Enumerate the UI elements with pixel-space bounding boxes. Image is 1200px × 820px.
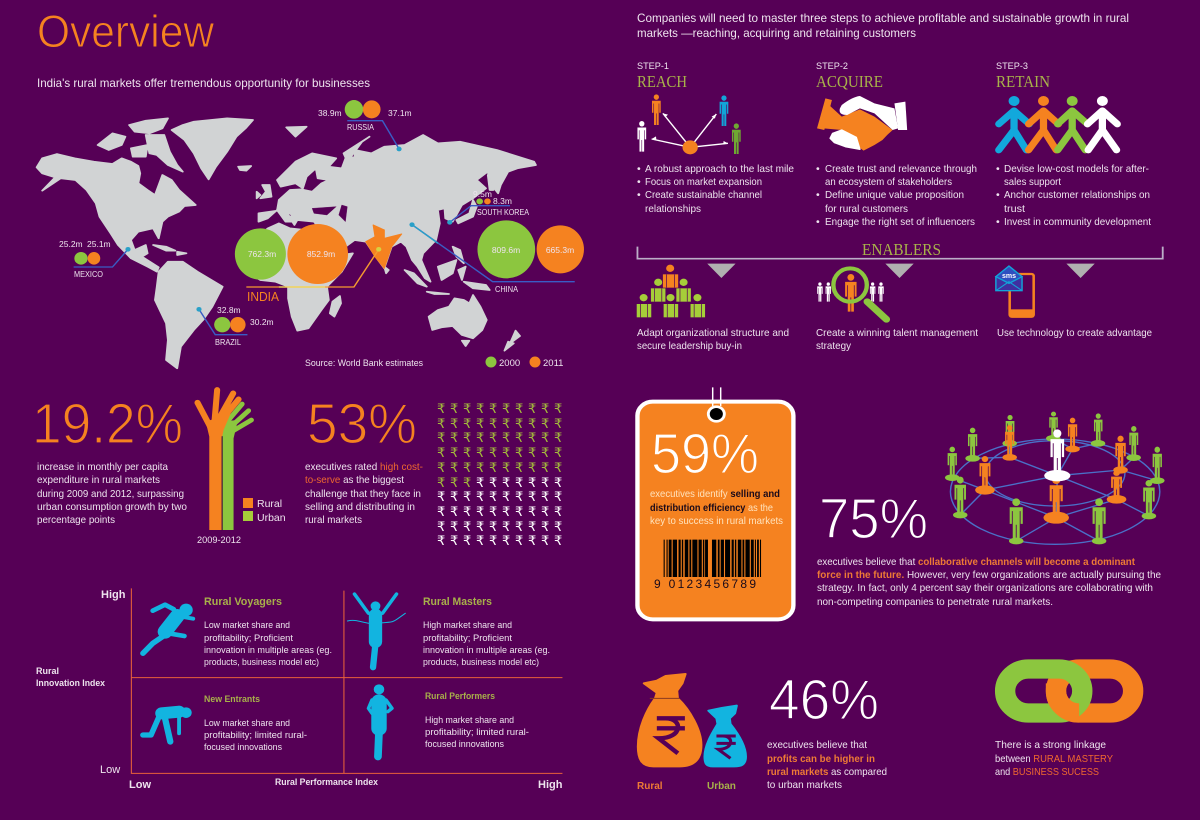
map legend: 2011 <box>543 358 563 369</box>
text: Rural Voyagers: profitability; Proficient <box>204 633 293 644</box>
network of people <box>945 412 1165 544</box>
text: 59% description: executives identify selling and <box>650 488 780 500</box>
text: enabler 2: Create a winning talent management <box>816 327 978 339</box>
text: 59% description: key to success in rural markets <box>650 515 783 527</box>
India highlight <box>366 225 402 268</box>
text: enabler 1: secure leadership buy-in <box>637 340 742 352</box>
country labels: 38.9m <box>318 108 342 118</box>
text: linkage: and BUSINESS SUCESS <box>995 766 1099 778</box>
rupee grid: 53 of 100 green <box>437 402 562 549</box>
rupee grid: 53 of 100 green: ₹₹₹₹₹₹₹₹₹₹ <box>437 461 562 476</box>
stat: 75%: 75% <box>819 487 928 551</box>
text: Rural Performers <box>425 691 529 750</box>
text: acquire bullets: • <box>816 163 820 175</box>
icon: reach network <box>637 94 741 154</box>
text: 46% description: to urban markets <box>767 779 842 791</box>
text: reach bullets: • <box>637 176 641 188</box>
text: 75% description: force in the future. However, very few organizations are actually pursuing the <box>817 569 1161 581</box>
icon: handshake <box>817 96 907 151</box>
stat: 19.2%: 19.2% <box>32 392 183 456</box>
text: Rural Voyagers: innovation in multiple areas (eg. <box>204 645 332 656</box>
country labels: 8.3m <box>493 196 512 206</box>
text: 46% description: executives believe that <box>767 739 867 751</box>
text: New Entrants: Low market share and <box>204 718 290 729</box>
text: 59% description: distribution efficiency as the <box>650 502 773 514</box>
step 2: acquire: STEP-2 <box>816 61 848 72</box>
text: enabler 3: Use technology to create advantage <box>997 327 1152 339</box>
step 1: reach: REACH <box>637 72 687 91</box>
bag labels <box>637 781 736 792</box>
text: enabler 2 <box>816 327 978 352</box>
text: reach bullets: • <box>637 189 641 201</box>
urban bag <box>705 706 746 766</box>
source note: Source: World Bank estimates <box>305 358 423 369</box>
legend: rural / urban: Rural <box>257 498 282 510</box>
country labels: CHINA <box>495 284 518 294</box>
text: 19.2% description: urban consumption growth by two <box>37 501 187 513</box>
icon: money bags <box>638 674 746 766</box>
text: New Entrants: New Entrants <box>204 694 260 705</box>
text: Rural Masters: products, business model etc) <box>423 657 539 668</box>
step 3: retain <box>996 61 1151 228</box>
text: Rural Voyagers: Rural Voyagers <box>204 596 282 608</box>
map legend: 2000 <box>499 358 520 369</box>
subtitle: India's rural markets offer tremendous opportunity for businesses <box>37 76 370 90</box>
text: Rural Performers: High market share and <box>425 715 514 726</box>
text: 53% description: executives rated high cost- <box>305 461 423 473</box>
text: acquire bullets: • <box>816 216 820 228</box>
country labels: INDIA <box>247 289 279 304</box>
rupee grid: 53 of 100 green: ₹₹₹₹₹₹₹₹₹₹ <box>437 402 562 417</box>
step 1: reach <box>637 61 794 215</box>
country labels: RUSSIA <box>347 122 374 132</box>
text: Rural Masters: Rural Masters <box>423 596 492 608</box>
text: retain bullets: Invest in community development <box>1004 216 1151 228</box>
connectors and country bubbles <box>74 100 584 335</box>
enablers bracket and pointers <box>637 247 1163 278</box>
text: Rural Voyagers: products, business model etc) <box>204 657 319 668</box>
rural bag <box>638 674 701 766</box>
text: 53% description: challenge that they face in <box>305 488 421 500</box>
icon: sprinter <box>143 604 193 653</box>
text: acquire bullets: • <box>816 189 820 201</box>
rupee grid: 53 of 100 green: ₹₹₹₹₹₹₹₹₹₹ <box>437 520 562 535</box>
step 3: retain: STEP-3 <box>996 61 1028 72</box>
country labels: 9.5m <box>473 189 492 199</box>
text: 19.2% description <box>37 461 187 526</box>
country labels: 852.9m <box>307 249 335 259</box>
legend: rural / urban <box>243 498 286 524</box>
text: acquire bullets: Define unique value proposition <box>825 189 964 201</box>
country labels: SOUTH KOREA <box>477 207 529 217</box>
text: retain bullets: Anchor customer relationships on <box>1004 189 1150 201</box>
country labels <box>59 108 574 347</box>
text: Rural Masters: High market share and <box>423 620 512 631</box>
axis labels: Rural Performance Index <box>275 777 378 787</box>
enablers heading: ENABLERS <box>862 240 941 259</box>
axis labels: Rural <box>36 666 59 676</box>
text: 19.2% description: increase in monthly per capita <box>37 461 168 473</box>
text: retain bullets: • <box>996 189 1000 201</box>
text: reach bullets: • <box>637 163 641 175</box>
country labels: 37.1m <box>388 108 412 118</box>
text: New Entrants: focused innovations <box>204 742 282 753</box>
text: linkage <box>995 739 1113 778</box>
text: retain bullets: • <box>996 216 1000 228</box>
text: 19.2% description: during 2009 and 2012, surpassing <box>37 488 184 500</box>
text: acquire bullets: for rural customers <box>825 203 908 215</box>
text: retain bullets: • <box>996 163 1000 175</box>
text: acquire bullets <box>816 163 977 228</box>
icon: chain link <box>1005 669 1133 713</box>
price tag card <box>637 387 793 619</box>
text: 53% description <box>305 461 423 526</box>
icon: paper chain people <box>999 96 1117 150</box>
step 3: retain: RETAIN <box>996 72 1050 91</box>
country labels: BRAZIL <box>215 337 241 347</box>
label: 2009-2012: 2009-2012 <box>197 535 241 546</box>
text: Rural Performers: profitability; limited rural- <box>425 727 529 738</box>
text: New Entrants <box>204 694 307 753</box>
rupee grid: 53 of 100 green: ₹₹₹₹₹₹₹₹₹₹ <box>437 534 562 549</box>
text: New Entrants: profitability; limited rural- <box>204 730 307 741</box>
text: 46% description: profits can be higher in <box>767 753 875 765</box>
text: 46% description: rural markets as compared <box>767 766 887 778</box>
text: retain bullets: Devise low-cost models for after- <box>1004 163 1149 175</box>
text: 53% description: selling and distributing in <box>305 501 415 513</box>
text: 75% description: strategy. In fact, only 4 percent say their organizations are collaborating with <box>817 582 1153 594</box>
step 2: acquire <box>816 61 977 228</box>
legend: rural / urban: Urban <box>257 512 286 524</box>
text: 53% description: rural markets <box>305 514 362 526</box>
world map with bubbles <box>37 100 584 368</box>
country labels: 809.6m <box>492 245 520 255</box>
step 2: acquire: ACQUIRE <box>816 72 883 91</box>
text: 19.2% description: percentage points <box>37 514 115 526</box>
icon: phone and sms envelope <box>996 266 1034 317</box>
text: retain bullets <box>996 163 1151 228</box>
country labels: 25.2m <box>59 239 83 249</box>
bag labels: Urban <box>707 781 736 792</box>
text: Rural Voyagers <box>204 596 332 668</box>
text: retain bullets: trust <box>1004 203 1025 215</box>
text: 59% description <box>650 488 783 527</box>
stat: 59%: 59% <box>651 422 759 486</box>
map land <box>37 118 536 368</box>
country labels: 665.3m <box>546 245 574 255</box>
barcode <box>654 558 761 591</box>
axis labels: High <box>101 589 126 601</box>
axes and grid <box>131 588 562 773</box>
text: Rural Performers: Rural Performers <box>425 691 495 702</box>
stat: 53%: 53% <box>307 392 417 456</box>
bag labels: Rural <box>637 781 663 792</box>
text: enabler 1: Adapt organizational structure and <box>637 327 789 339</box>
axis labels: Innovation Index <box>36 678 105 688</box>
axis labels: Low <box>129 779 151 791</box>
axis labels: Low <box>100 764 120 776</box>
text: Rural Masters: innovation in multiple areas (eg. <box>423 645 550 656</box>
country labels: MEXICO <box>74 269 103 279</box>
text: acquire bullets: Create trust and relevance through <box>825 163 977 175</box>
text: reach bullets: Create sustainable channel <box>645 189 762 201</box>
icon: runner <box>368 684 392 757</box>
step 1: reach: STEP-1 <box>637 61 669 72</box>
stat: 46%: 46% <box>769 668 879 732</box>
text: Rural Masters <box>423 596 550 668</box>
text: acquire bullets: an ecosystem of stakeholders <box>825 176 952 188</box>
rupee grid: 53 of 100 green: ₹₹₹₹₹₹₹₹₹₹ <box>437 490 562 505</box>
title: Overview: Overview <box>37 6 214 57</box>
icon: phone and sms envelope: sms <box>1002 273 1016 280</box>
rupee grid: 53 of 100 green: ₹₹₹ ₹₹₹₹₹₹₹ <box>437 476 562 491</box>
country labels: 762.3m <box>248 249 276 259</box>
icon: organization pyramid <box>637 265 705 317</box>
axis labels <box>36 589 563 791</box>
text: reach bullets: A robust approach to the last mile <box>645 163 794 175</box>
text: 75% description: non-competing companies to penetrate rural markets. <box>817 596 1053 608</box>
quadrant chart <box>36 588 563 791</box>
text: 53% description: to-serve as the biggest <box>305 474 404 486</box>
text: enabler 1 <box>637 327 789 352</box>
text: 46% description <box>767 739 887 791</box>
icon: crouching starter <box>143 707 192 742</box>
rupee grid: 53 of 100 green: ₹₹₹₹₹₹₹₹₹₹ <box>437 505 562 520</box>
rupee grid: 53 of 100 green: ₹₹₹₹₹₹₹₹₹₹ <box>437 417 562 432</box>
text: 75% description <box>817 556 1161 608</box>
tag body and hole <box>637 387 793 619</box>
text: enabler 2: strategy <box>816 340 852 352</box>
text: reach bullets: Focus on market expansion <box>645 176 762 188</box>
text: 19.2% description: expenditure in rural markets <box>37 474 160 486</box>
rupee grid: 53 of 100 green: ₹₹₹₹₹₹₹₹₹₹ <box>437 446 562 461</box>
map legend <box>486 356 563 369</box>
text: 75% description: executives believe that collaborative channels will become a dominant <box>817 556 1135 568</box>
text: linkage: There is a strong linkage <box>995 739 1106 751</box>
intro text: three steps: Companies will need to master three steps to achieve profitable and sustainable growth in rural <box>637 11 1129 25</box>
axis labels: High <box>538 779 563 791</box>
country labels: 30.2m <box>250 317 274 327</box>
text: Rural Performers: focused innovations <box>425 739 504 750</box>
rupee grid: 53 of 100 green: ₹₹₹₹₹₹₹₹₹₹ <box>437 431 562 446</box>
text: linkage: between RURAL MASTERY <box>995 753 1113 765</box>
country labels: 25.1m <box>87 239 111 249</box>
text: retain bullets: sales support <box>1004 176 1061 188</box>
intro text: three steps: markets —reaching, acquiring and retaining customers <box>637 26 916 40</box>
text: reach bullets <box>637 163 794 215</box>
icon: talent magnifier <box>817 268 886 319</box>
icon: rural and urban hands <box>197 390 251 530</box>
country labels: 32.8m <box>217 305 241 315</box>
icon: winner <box>347 594 405 667</box>
intro text: three steps <box>637 11 1129 40</box>
text: Rural Voyagers: Low market share and <box>204 620 290 631</box>
barcode: 9 0123456789 <box>654 577 756 591</box>
text: acquire bullets: Engage the right set of influencers <box>825 216 975 228</box>
text: Rural Masters: profitability; Proficient <box>423 633 512 644</box>
text: reach bullets: relationships <box>645 203 701 215</box>
